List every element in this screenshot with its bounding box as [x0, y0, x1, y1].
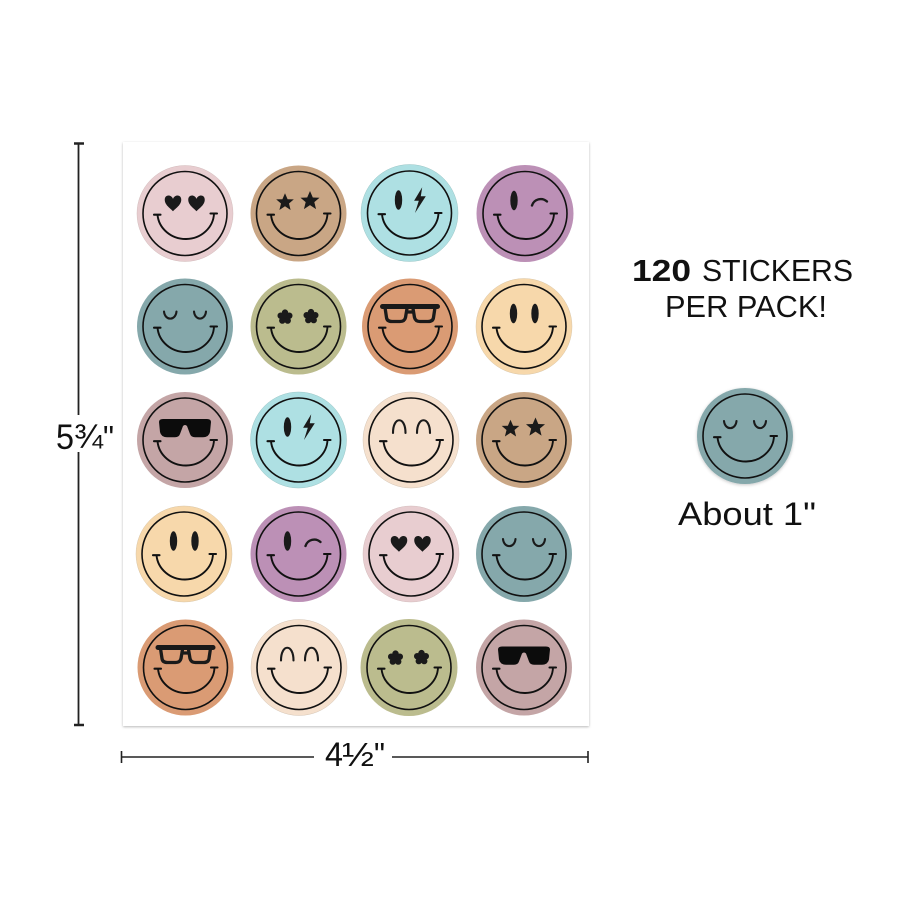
caption: about 1 inch: About 1" [678, 496, 816, 532]
heading: 120 stickers per pack: 120 [632, 253, 691, 288]
width label [325, 736, 385, 774]
heading: 120 stickers per pack: PER PACK! [665, 289, 827, 324]
sticker: sunglasses, mauve [476, 620, 572, 716]
sticker: star eyes, tan [250, 166, 346, 262]
sticker: lightning eye, aqua [361, 164, 458, 262]
sticker: arc eyes, cream [251, 620, 347, 716]
sticker: wink, purple [250, 506, 346, 602]
height label: " [103, 419, 114, 456]
vertical dimension line [74, 143, 84, 725]
height label: 5 [56, 418, 74, 457]
width label: " [374, 736, 385, 773]
horizontal dimension line [121, 751, 588, 763]
heading: 120 stickers per pack [632, 253, 853, 324]
sticker: heart eyes, pink [137, 166, 233, 262]
sticker: heart eyes, pink [363, 506, 459, 602]
sticker: lightning eye, aqua [250, 392, 346, 488]
sticker: flower eyes, olive [360, 619, 458, 716]
panel: sticker sheet [123, 142, 589, 726]
sticker: sunglasses, mauve [137, 392, 233, 488]
sample sticker: actual size [697, 388, 793, 484]
sticker: closed eyes, teal [137, 278, 233, 374]
sticker: flower eyes, olive [250, 278, 346, 374]
height label: ¾ [74, 418, 104, 456]
sticker: oval eyes, yellow [136, 506, 232, 602]
width label: 4 [325, 736, 343, 774]
sticker: closed eyes, teal [476, 506, 572, 602]
sticker: oval eyes, yellow [476, 278, 572, 374]
width label: ½ [342, 736, 374, 773]
sticker: glasses, orange [138, 620, 234, 716]
sticker: glasses, orange [362, 278, 458, 374]
heading: 120 stickers per pack: STICKERS [702, 253, 853, 288]
sticker: wink, purple [476, 165, 574, 262]
height label [56, 418, 114, 457]
sticker: star eyes, tan [476, 392, 572, 488]
sticker: arc eyes, cream [363, 392, 459, 488]
